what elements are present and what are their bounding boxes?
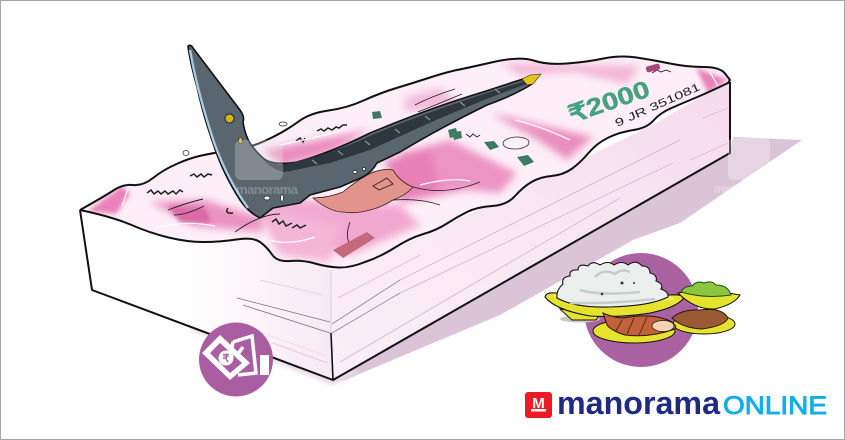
- blade highlight: [190, 50, 248, 208]
- rice shading: [570, 270, 655, 303]
- left face of stack: [80, 210, 333, 380]
- outline of top note surface: [80, 56, 730, 268]
- pink mark near note corner: [645, 63, 661, 73]
- debris flecks: [183, 122, 366, 202]
- watermark text left: manorama: [236, 182, 299, 197]
- greens bowl: [678, 282, 740, 309]
- note seal: [503, 136, 529, 150]
- portrait lips and collar lines: [347, 178, 480, 248]
- watermark logo left: [235, 140, 283, 180]
- rice mound: [557, 262, 668, 307]
- shadow of the note stack: [190, 137, 802, 385]
- rivets: [225, 114, 234, 123]
- handle segments: [312, 89, 500, 164]
- meat plate: [672, 309, 735, 334]
- logo M: M: [532, 395, 545, 412]
- white wisps on note: [122, 72, 718, 242]
- pickaxe: [183, 45, 541, 218]
- icon: money hand: [199, 322, 273, 396]
- logo underline bar: [531, 409, 546, 412]
- portrait on note: [313, 170, 413, 213]
- watermark: [235, 138, 770, 197]
- green security marks: [372, 111, 534, 166]
- brown patch on note: [333, 232, 375, 258]
- denomination: ₹2000: [565, 76, 653, 129]
- serial number: 9 JR 351081: [613, 81, 702, 130]
- page lines on left face: [237, 280, 330, 363]
- note squiggle inscriptions: [147, 125, 347, 228]
- banknote: [202, 335, 250, 380]
- note stack: [70, 40, 750, 380]
- pickaxe body: [188, 45, 532, 218]
- lower stack corner: [331, 333, 333, 380]
- stack outer edges: [80, 82, 730, 380]
- logo online wordmark: ONLINE: [723, 392, 827, 420]
- page lines on right face: [332, 280, 400, 333]
- right face of stack: [331, 80, 730, 380]
- logo red square: [525, 392, 552, 418]
- rice plate: [545, 262, 683, 322]
- purple circle behind meal: [584, 253, 698, 367]
- stack corner fold: [330, 270, 332, 333]
- yellow tip of handle: [522, 74, 541, 85]
- logo: manorama online: [525, 385, 827, 421]
- rice grains: [601, 282, 635, 295]
- rupee coin: [218, 350, 234, 366]
- watermark text right: manorama: [714, 182, 764, 196]
- watermark logo right: [728, 138, 770, 180]
- top note surface: [84, 58, 729, 266]
- hand outline: [232, 336, 256, 375]
- banknote inner panel: [210, 343, 242, 373]
- pink note shading: [150, 63, 640, 262]
- dark handle groove: [264, 81, 527, 172]
- meal illustration: [545, 253, 740, 367]
- logo manorama wordmark: manorama: [557, 385, 720, 421]
- hand cuff: [260, 355, 269, 375]
- icon: money hand: ₹: [222, 353, 230, 365]
- fish plate: [593, 313, 676, 343]
